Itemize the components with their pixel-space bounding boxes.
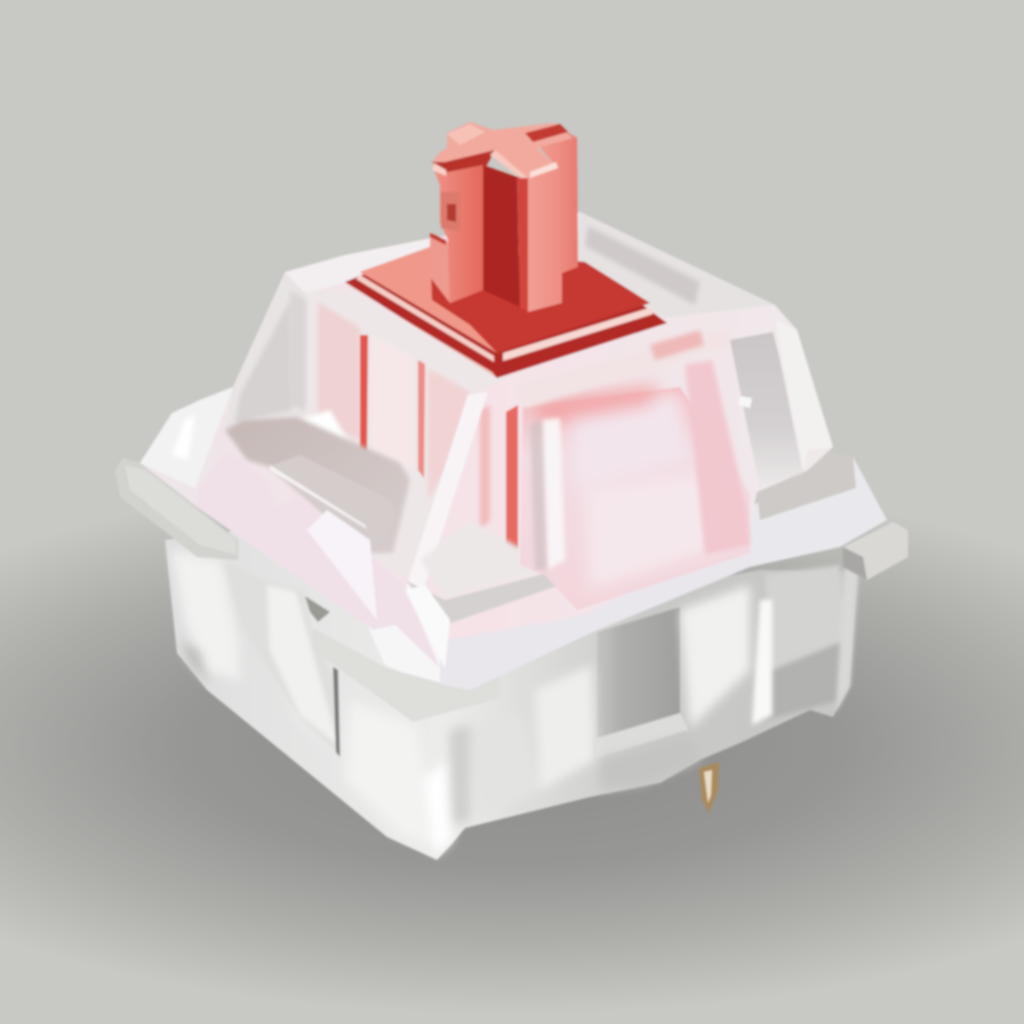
grey latch recess [225,417,410,553]
white column beside metal [600,585,750,790]
switch [115,122,908,860]
inner side [517,175,528,312]
embossed mark [441,192,460,232]
cross top [432,122,573,178]
right flange top [750,448,887,567]
right front band [440,530,750,690]
white fill below skirt [365,585,450,690]
left arm lower [430,233,450,303]
left mechanism [224,562,340,755]
red reflection lines [360,335,368,452]
left arm upper [432,165,483,303]
pink vertical panels [318,302,470,500]
metal contact window [597,607,680,740]
left tab [115,458,238,560]
right window [520,387,750,610]
lavender skirt [197,450,440,668]
left lower highlights [172,550,595,855]
left top white corner [140,387,233,488]
lower housing [165,530,858,860]
grey pill panel [730,332,803,487]
front rim [313,628,500,722]
corner post [225,272,308,430]
right lower block [752,565,858,725]
rear top ledge [575,212,775,318]
dark slit [333,667,340,757]
shadowed underside of cross [432,150,495,176]
contact pin [699,762,719,813]
pink right strip [685,360,750,555]
upper housing [140,212,833,668]
bright spot in window [300,410,350,450]
flange rim [115,448,908,722]
red stem [430,122,578,312]
left inner window [225,290,505,580]
strut [405,392,488,590]
dark web [483,165,520,307]
lower central ledge [420,520,555,598]
front column [528,123,578,312]
front top ledge [515,328,735,408]
red stem plate [345,247,667,378]
right tab [843,522,908,580]
